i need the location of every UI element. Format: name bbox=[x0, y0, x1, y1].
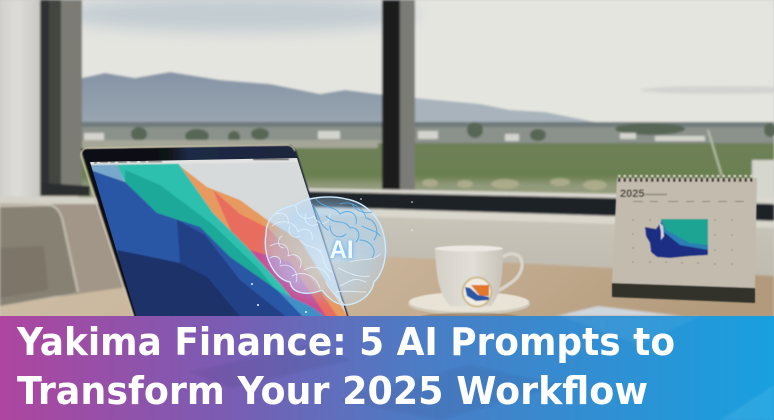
calendar Washington state map bbox=[645, 219, 708, 258]
AI label glow: AI bbox=[330, 236, 354, 264]
window view: far town bbox=[78, 122, 774, 143]
window view: sky bbox=[78, 0, 774, 130]
background: room and window view bbox=[0, 0, 774, 320]
sparkles bbox=[251, 198, 413, 313]
laptop screen wallpaper bbox=[85, 157, 355, 320]
calendar page bbox=[612, 178, 757, 288]
laptop menu bar bbox=[88, 157, 298, 165]
wall below window and sill bbox=[0, 200, 774, 280]
title line 1: Yakima Finance: 5 AI Prompts to bbox=[16, 320, 675, 364]
office chair bbox=[0, 204, 79, 306]
calendar spiral binding bbox=[618, 178, 755, 182]
laptop bezel bbox=[81, 145, 349, 318]
desk bbox=[0, 256, 774, 320]
title text bbox=[16, 320, 675, 413]
cup body bbox=[435, 246, 503, 306]
brain outline and folds bbox=[265, 197, 386, 305]
calendar year: 2025 bbox=[620, 188, 644, 200]
calendar base bbox=[612, 283, 755, 303]
window view: mountains bbox=[82, 72, 385, 125]
wall bbox=[0, 0, 42, 205]
calendar grid dots bbox=[632, 201, 744, 265]
saucer bbox=[408, 293, 530, 315]
coffee cup and saucer bbox=[408, 246, 530, 321]
desk calendar bbox=[612, 176, 757, 303]
holographic AI brain bbox=[251, 197, 413, 313]
glass bottom light strip bbox=[290, 188, 774, 204]
window frame: center mullion bbox=[382, 0, 415, 196]
papers on desk bbox=[556, 306, 682, 316]
laptop bbox=[81, 145, 355, 320]
window frame: bottom rail bbox=[42, 183, 90, 196]
cup handle bbox=[498, 254, 522, 291]
title line 2: Transform Your 2025 Workflow bbox=[17, 369, 648, 413]
window view: fields bbox=[78, 143, 774, 203]
brain glow bbox=[267, 202, 383, 298]
title banner bbox=[0, 316, 774, 420]
AI label: AI bbox=[330, 236, 354, 264]
window frame: left post bbox=[40, 0, 82, 196]
banner gradient bbox=[0, 316, 774, 420]
blurred document under banner bbox=[190, 316, 774, 420]
cup logo bbox=[462, 276, 492, 308]
